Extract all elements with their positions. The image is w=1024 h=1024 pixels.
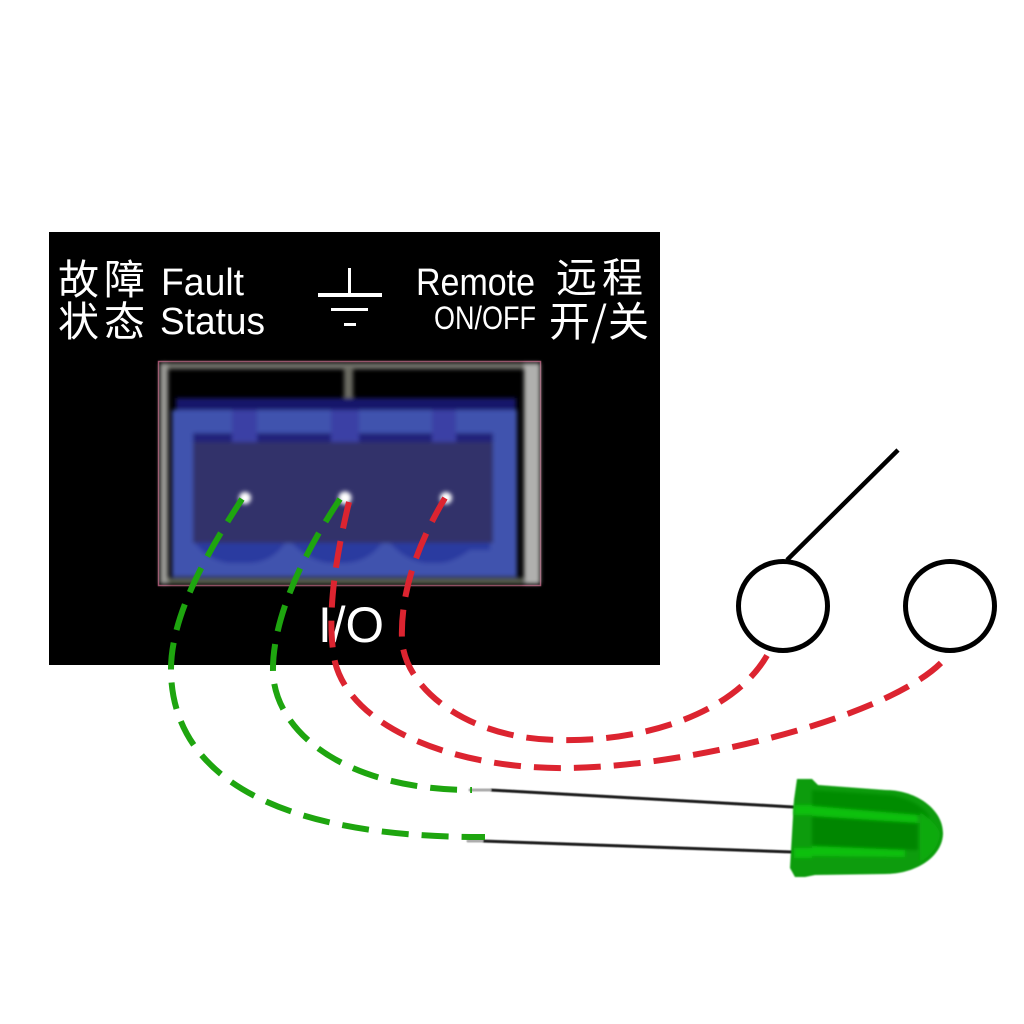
label: Remote ON/OFF: Remote bbox=[416, 262, 535, 304]
LED bbox=[468, 779, 943, 877]
switch lever bbox=[787, 450, 898, 560]
red wires bbox=[331, 498, 948, 768]
icon: ground symbol bbox=[318, 268, 382, 326]
label: fault status Chinese bbox=[58, 246, 145, 348]
LED leads bbox=[468, 790, 793, 852]
label: remote switch Chinese bbox=[549, 244, 649, 348]
label: I/O: I/O bbox=[318, 597, 384, 653]
label: Fault Status: Status bbox=[160, 301, 265, 343]
label: Fault Status bbox=[160, 262, 265, 343]
green wires bbox=[171, 499, 485, 837]
panel: black device face bbox=[49, 232, 660, 665]
label: fault status Chinese: 状态 bbox=[58, 288, 145, 348]
switch bbox=[738, 450, 994, 650]
icon: right switch terminal bbox=[906, 562, 994, 650]
icon: left switch terminal bbox=[738, 562, 828, 650]
label: fault status Chinese: 故障 bbox=[58, 246, 145, 306]
label: Fault Status: Fault bbox=[161, 262, 244, 304]
label: Remote ON/OFF bbox=[416, 262, 536, 336]
connector: blue terminal block bbox=[158, 362, 540, 586]
label: remote switch Chinese: 开/关 bbox=[549, 288, 649, 348]
label: remote switch Chinese: 远程 bbox=[556, 244, 643, 304]
pins bbox=[239, 492, 452, 504]
LED body bbox=[790, 779, 943, 877]
label: Remote ON/OFF: ON/OFF bbox=[434, 300, 536, 336]
